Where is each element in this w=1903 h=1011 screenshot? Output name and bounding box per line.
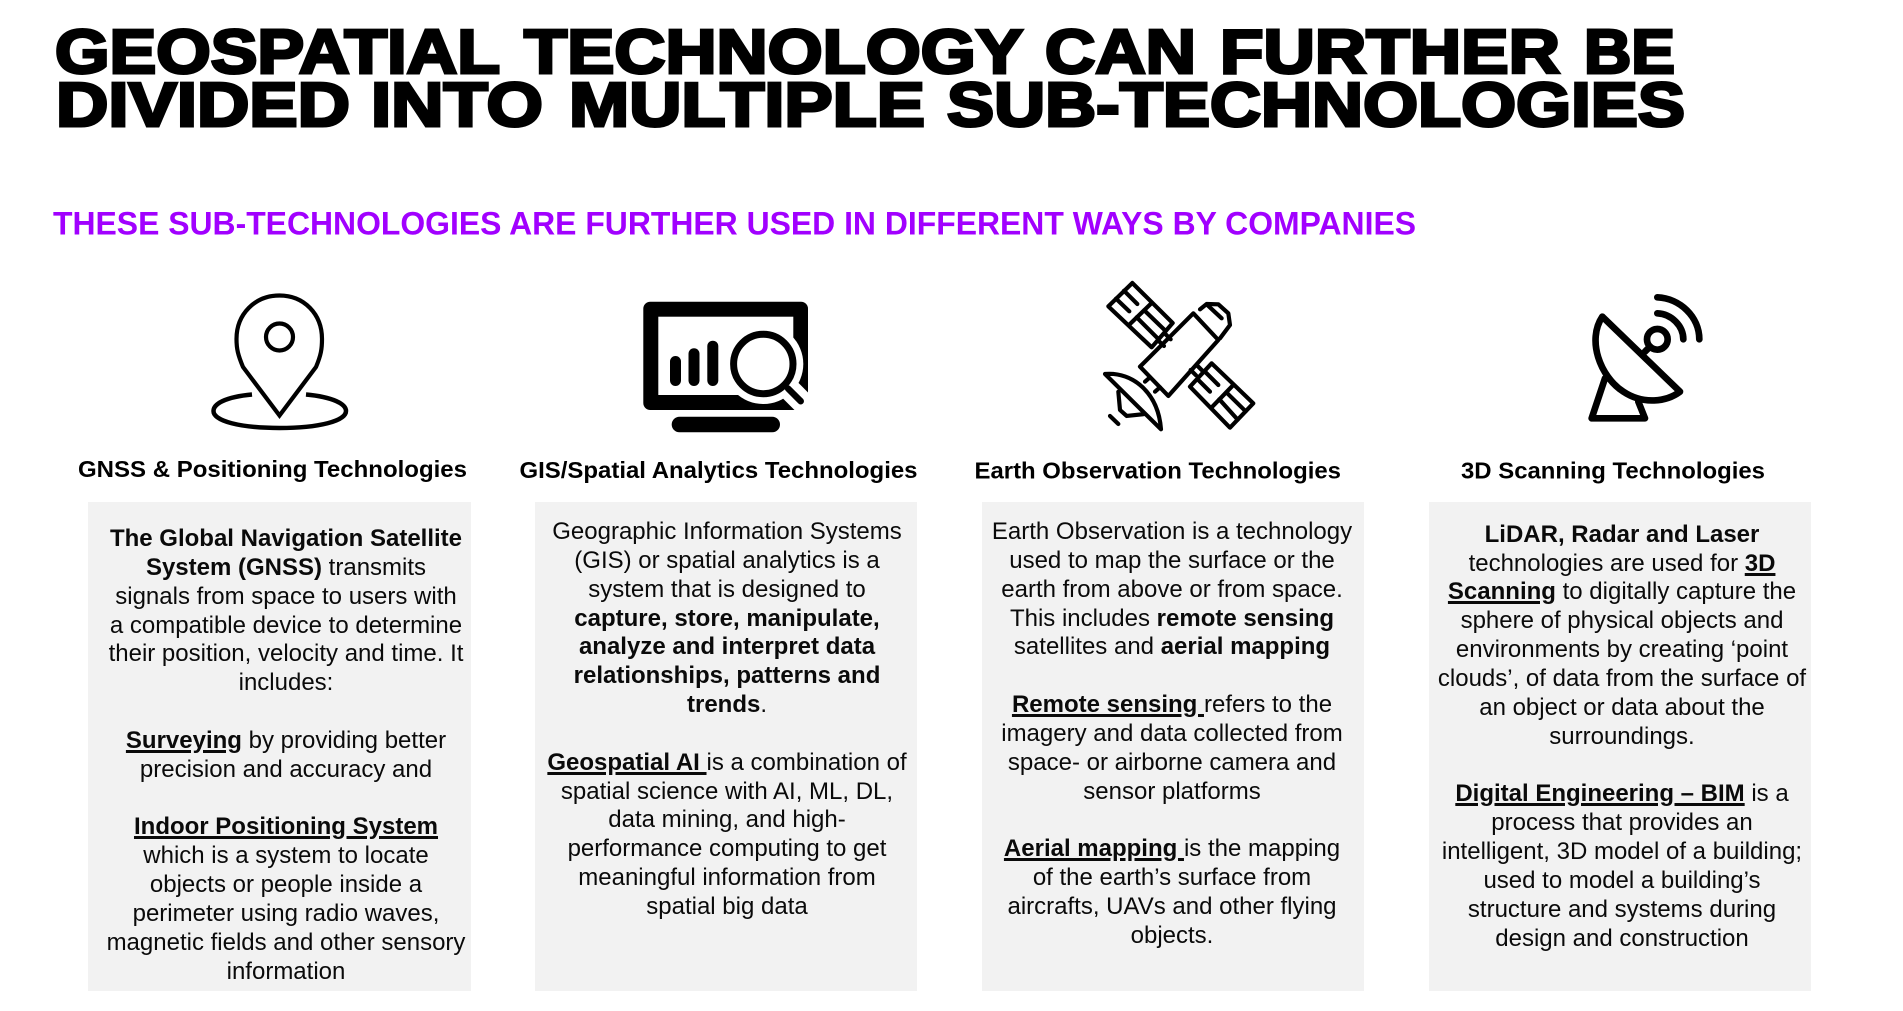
text block: GIS description: trends. [687,691,767,718]
panel: 3D scanning description [1429,502,1811,991]
text block: GIS description: data mining, and high- [608,806,846,833]
text block: 3D scanning description: structure and systems during [1468,896,1776,923]
text block: GIS description: system that is designed to [588,576,866,603]
column: GIS and spatial analytics [520,302,918,991]
text block: 3D scanning description [1438,521,1806,952]
text block: GIS description: relationships, patterns and [574,662,880,689]
column: 3D scanning [1429,294,1811,991]
text block: GNSS description: their position, velocity and time. It [109,640,463,667]
text block: GNSS description: precision and accuracy and [140,756,432,783]
text block: GNSS description: Indoor Positioning System [134,813,438,840]
text block: 3D scanning description: an object or data about the [1479,694,1765,721]
text block: Earth observation description: aircrafts, UAVs and other flying [1007,893,1337,920]
text block: 3D scanning description: environments by creating ‘point [1456,636,1788,663]
text block: GNSS description: signals from space to users with [115,583,457,610]
text block: 3D scanning description: sphere of physical objects and [1461,607,1783,634]
text block: GIS description: spatial big data [646,893,808,920]
subtitle: THESE SUB-TECHNOLOGIES ARE FURTHER USED IN DIFFERENT WAYS BY COMPANIES [53,206,1416,242]
column: Earth observation [974,280,1364,991]
text block: GNSS description: magnetic fields and other sensory [107,929,465,956]
icon: satellite [1102,280,1256,432]
text block: Earth observation description: Remote sensing refers to the [1012,691,1332,718]
panel: GNSS description [88,502,471,991]
text block: 3D scanning description: process that provides an [1491,809,1753,836]
text block: Earth observation description: Aerial mapping is the mapping [1004,835,1340,862]
title: INTO [371,70,543,140]
text block: 3D scanning description: Scanning to digitally capture the [1448,578,1796,605]
heading: GNSS: GNSS & Positioning Technologies [78,456,467,482]
text block: GIS description: performance computing to get [568,835,886,862]
text block: Earth observation description: earth from above or from space. [1001,576,1343,603]
text block: 3D scanning description: design and construction [1495,925,1749,952]
text block: GNSS description: perimeter using radio waves, [133,900,439,927]
heading: GIS: GIS/Spatial Analytics Technologies [520,457,918,483]
column: GNSS and positioning [78,293,471,991]
text block: GNSS description [107,525,466,985]
text block: 3D scanning description: LiDAR, Radar and Laser [1485,521,1759,548]
text block: GIS description: Geospatial AI is a combination of [547,749,907,776]
text block: Earth observation description: Earth Observation is a technology [992,518,1352,545]
text block: 3D scanning description: used to model a building’s [1483,867,1761,894]
title: BE [1584,17,1675,87]
title [55,17,1685,140]
text block: GNSS description: a compatible device to determine [110,612,462,639]
text block: GNSS description: System (GNSS) transmits [146,554,426,581]
text block: Earth observation description [992,518,1352,949]
title: FURTHER [1220,17,1560,87]
text block: GNSS description: The Global Navigation Satellite [110,525,462,552]
panel: GIS description [535,502,917,991]
text block: 3D scanning description: Digital Engineering – BIM is a [1455,780,1789,807]
text block: 3D scanning description: surroundings. [1549,723,1695,750]
title: GEOSPATIAL [55,17,500,87]
text block: GIS description: meaningful information from [578,864,876,891]
text block: 3D scanning description: technologies are used for 3D [1469,550,1775,577]
text block: Earth observation description: objects. [1131,922,1213,949]
heading: 3D scanning: 3D Scanning Technologies [1461,457,1765,483]
text block: GIS description: (GIS) or spatial analytics is a [574,547,880,574]
text block: GIS description: Geographic Information Systems [552,518,902,545]
text block: Earth observation description: of the earth’s surface from [1033,864,1311,891]
text block: GNSS description: which is a system to locate [143,842,429,869]
text block: GNSS description: objects or people inside a [150,871,422,898]
text block: Earth observation description: This includes remote sensing [1010,605,1334,632]
heading: Earth observation: Earth Observation Technologies [974,457,1341,483]
text block: Earth observation description: satellites and aerial mapping [1014,633,1330,660]
text block: GIS description: spatial science with AI, ML, DL, [561,778,893,805]
text block: GIS description: analyze and interpret data [579,633,875,660]
text block: GIS description [547,518,907,920]
text block: Earth observation description: used to map the surface or the [1009,547,1335,574]
title: CAN [1045,17,1196,87]
icon: radar dish [1588,294,1703,422]
title: DIVIDED [56,70,350,140]
text block: GNSS description: information [227,958,345,985]
title: SUB-TECHNOLOGIES [947,70,1685,140]
text block: Earth observation description: imagery and data collected from [1001,720,1343,747]
text block: GIS description: capture, store, manipulate, [574,605,880,632]
text block: Earth observation description: sensor platforms [1083,778,1261,805]
text block: 3D scanning description: intelligent, 3D model of a building; [1442,838,1802,865]
text block: GNSS description: Surveying by providing better [126,727,446,754]
text block: GNSS description: includes: [239,669,333,696]
icon: monitor with chart and magnifier [643,302,808,432]
panel: Earth observation description [982,502,1364,991]
title: TECHNOLOGY [524,17,1023,87]
text block: 3D scanning description: clouds’, of data from the surface of [1438,665,1806,692]
icon: map pin [211,293,348,430]
text block: Earth observation description: space- or airborne camera and [1008,749,1336,776]
title: MULTIPLE [569,70,925,140]
